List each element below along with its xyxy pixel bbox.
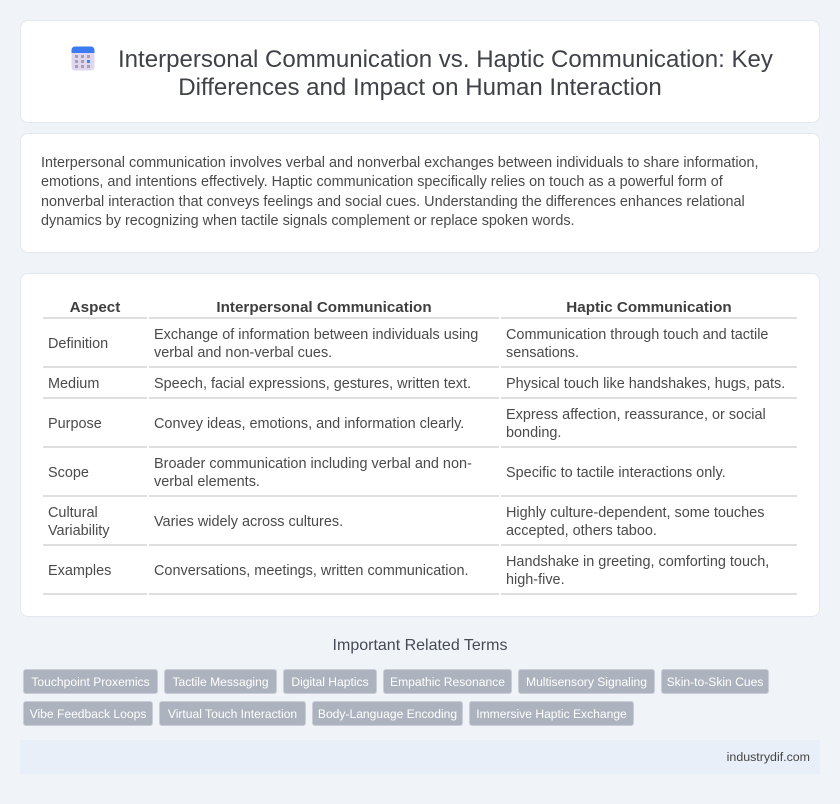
table card [20,273,820,617]
comparison table: Highly culture-dependent, some touches [506,505,764,521]
related term tags: Tactile Messaging [172,675,269,689]
comparison table: Examples [48,563,111,579]
intro text [41,155,759,229]
comparison table: Cultural [48,505,98,521]
comparison table: Broader communication including verbal and non- [154,456,472,472]
comparison table: Handshake in greeting, comforting touch, [506,554,769,570]
related term tags: Body-Language Encoding [318,707,457,721]
comparison table: Purpose [48,416,102,432]
comparison table: accepted, others taboo. [506,523,657,539]
footer bar [20,740,820,774]
comparison table: Definition [48,336,108,352]
intro text: nonverbal interaction that conveys feelings and social cues. Understanding the differences enhances relational [41,194,745,210]
comparison table: Express affection, reassurance, or social [506,407,766,423]
related term tags: Digital Haptics [291,675,369,689]
related term tags: Touchpoint Proxemics [31,675,150,689]
footer source: industrydif.com [727,750,810,764]
comparison table: Speech, facial expressions, gestures, written text. [154,376,471,392]
header card [20,20,820,123]
comparison table: Haptic Communication [566,299,732,316]
related term tags [23,669,769,726]
comparison table: sensations. [506,345,579,361]
related term tags: Skin-to-Skin Cues [667,675,763,689]
comparison table: Variability [48,523,110,539]
comparison table: verbal elements. [154,474,260,490]
comparison table: Specific to tactile interactions only. [506,465,726,481]
comparison table [43,299,797,595]
intro text: emotions, and intentions effectively. Haptic communication specifically relies on touch as a powerful form of [41,174,723,190]
comparison table: Medium [48,376,99,392]
title: Differences and Impact on Human Interaction [178,74,662,101]
related term tags: Multisensory Signaling [526,675,647,689]
comparison table: high-five. [506,572,565,588]
comparison table: Interpersonal Communication [216,299,432,316]
comparison table: verbal and non-verbal cues. [154,345,332,361]
related term tags: Empathic Resonance [390,675,505,689]
comparison table: Conversations, meetings, written communication. [154,563,469,579]
intro text: Interpersonal communication involves verbal and nonverbal exchanges between individuals to share information, [41,155,759,171]
comparison table: Convey ideas, emotions, and information clearly. [154,416,464,432]
comparison table: Scope [48,465,89,481]
comparison table: Exchange of information between individuals using [154,327,478,343]
icon: calendar [72,46,94,70]
intro text: dynamics by recognizing when tactile signals complement or replace spoken words. [41,213,575,229]
comparison table: Varies widely across cultures. [154,514,343,530]
title: Interpersonal Communication vs. Haptic Communication: Key [118,46,773,73]
related term tags: Vibe Feedback Loops [30,707,146,721]
comparison table: bonding. [506,425,561,441]
comparison table: Aspect [70,299,120,316]
intro card [20,133,820,253]
related term tags: Immersive Haptic Exchange [476,707,627,721]
comparison table: Communication through touch and tactile [506,327,768,343]
title [118,46,773,101]
related term tags: Virtual Touch Interaction [168,707,297,721]
comparison table: Physical touch like handshakes, hugs, pats. [506,376,785,392]
related terms heading: Important Related Terms [333,637,507,654]
